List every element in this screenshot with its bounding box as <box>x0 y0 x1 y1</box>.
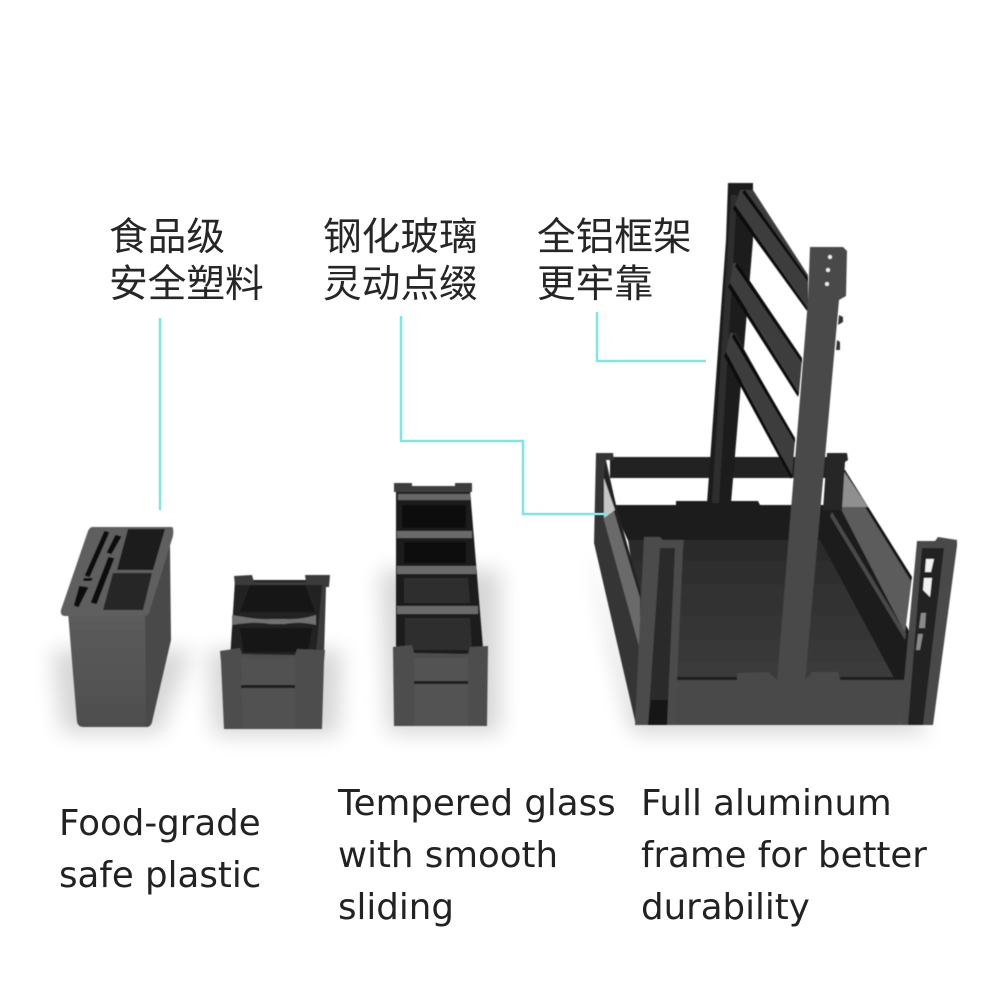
icon: long glass drawer box <box>393 483 488 726</box>
center upright column <box>777 300 839 682</box>
english caption: plastic: safe plastic <box>59 855 261 896</box>
leader line: frame <box>597 312 706 361</box>
chinese label: plastic: 食品级 <box>109 216 225 259</box>
icon: short glass drawer box <box>220 575 330 729</box>
tray floor <box>628 540 910 680</box>
english caption: frame: frame for better <box>641 835 927 876</box>
leader line: glass <box>401 316 608 514</box>
shadows under products <box>52 545 930 735</box>
front left post <box>635 537 684 725</box>
right glass panel <box>840 470 912 633</box>
diagonal ladder bars <box>735 190 808 308</box>
icon: food-grade plastic bin <box>61 527 173 727</box>
frame holes <box>828 255 832 259</box>
back wall <box>612 501 846 545</box>
back rail <box>610 457 832 478</box>
english caption: frame: Full aluminum <box>641 783 892 824</box>
right side wall <box>820 505 910 680</box>
chinese label: frame: 更牢靠 <box>537 263 653 306</box>
english caption: plastic: Food-grade <box>59 803 261 844</box>
front right post <box>900 537 957 725</box>
english caption: frame: durability <box>641 887 810 928</box>
leader line: plastic <box>159 318 161 510</box>
left side frame <box>594 453 640 725</box>
back upright <box>707 183 753 503</box>
chinese label: glass: 灵动点缀 <box>323 263 478 306</box>
english caption: glass: with smooth <box>338 835 558 876</box>
chinese label: glass: 钢化玻璃 <box>323 216 478 259</box>
back right post <box>823 453 848 510</box>
front panel <box>635 672 905 725</box>
english caption: glass: sliding <box>338 887 454 928</box>
icon: aluminum frame pull-out basket <box>594 183 957 725</box>
chinese label: plastic: 安全塑料 <box>109 263 264 306</box>
chinese label: frame: 全铝框架 <box>537 216 692 259</box>
english caption: glass: Tempered glass <box>337 783 616 824</box>
